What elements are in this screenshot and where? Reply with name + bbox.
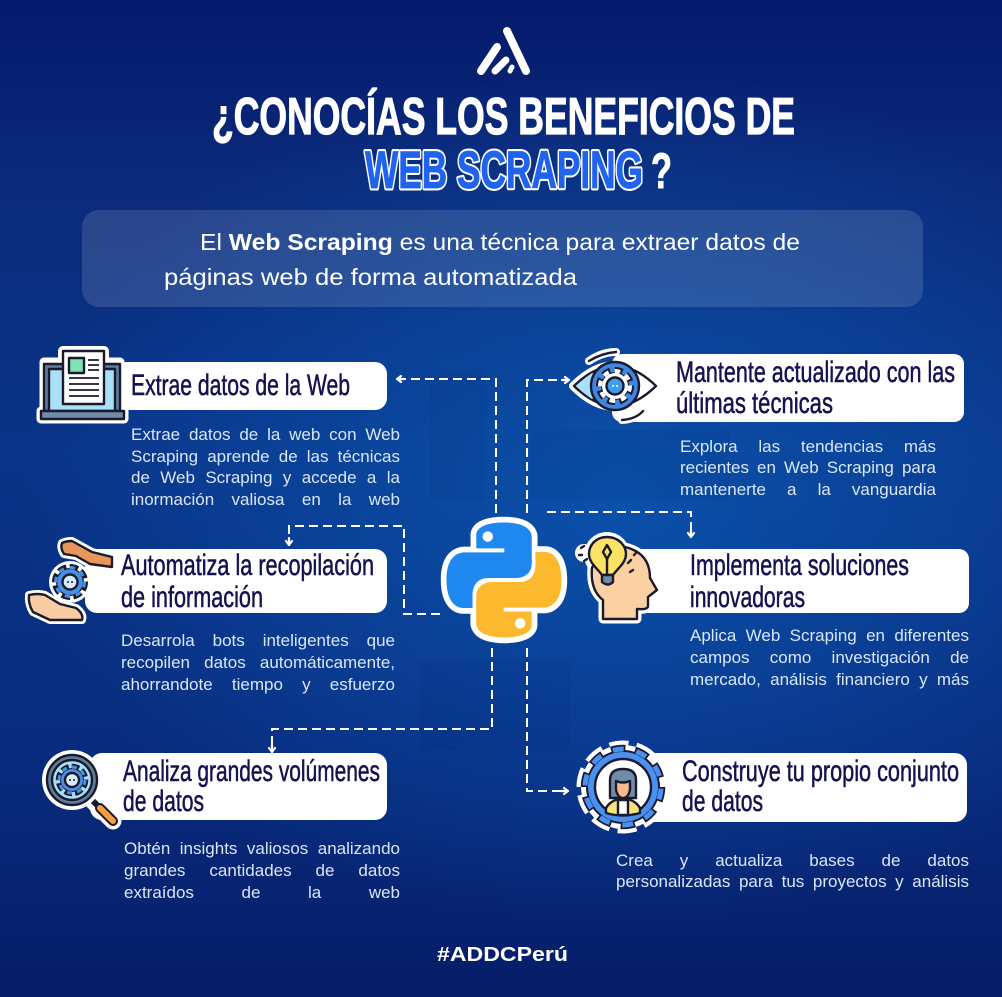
body text: Explora las tendencias más (680, 437, 936, 456)
body text: Obtén insights valiosos analizando (124, 839, 400, 858)
body text (616, 851, 969, 891)
heading card: de datos (682, 785, 763, 818)
body text (121, 631, 395, 694)
heading card: Extrae datos de la Web (131, 369, 350, 402)
body text: ahorrandote tiempo y esfuerzo (121, 675, 395, 694)
python logo (440, 516, 568, 644)
title: WEB SCRAPING (365, 141, 643, 200)
icon: laptop with document (41, 351, 124, 419)
body text: Aplica Web Scraping en diferentes (690, 626, 969, 645)
heading card (612, 354, 964, 422)
body text (131, 425, 400, 509)
body text (124, 839, 400, 902)
heading card: de información (121, 581, 263, 614)
body text: mantenerte a la vanguardia (680, 480, 936, 499)
body text: recopilen datos automáticamente, (121, 653, 395, 672)
heading card (625, 549, 969, 614)
panel: analiza (42, 750, 400, 902)
heading card: de datos (123, 785, 204, 818)
heading card (85, 549, 387, 614)
body text: extraídos de la web (124, 883, 400, 902)
heading card: últimas técnicas (676, 387, 833, 420)
footer hashtag: #ADDCPerú (437, 944, 568, 966)
panel: construye (576, 740, 969, 891)
icon: hands holding gear (29, 541, 112, 620)
body text (680, 437, 936, 499)
body text: personalizadas para tus proyectos y análisis (616, 872, 969, 891)
body text: recientes en Web Scraping para (680, 458, 936, 477)
heading card: innovadoras (690, 581, 805, 614)
title (212, 87, 795, 200)
icon: eye with gear (573, 352, 657, 420)
body text: campos como investigación de (690, 648, 969, 667)
body text (690, 626, 969, 689)
panel: automatiza (24, 537, 395, 694)
panel: extrae datos (36, 346, 400, 509)
body text: mercado, análisis financiero y más (690, 670, 969, 689)
logo (477, 27, 530, 75)
body text: de Web Scraping y accede a la (131, 468, 400, 487)
heading card: Automatiza la recopilación (121, 549, 374, 582)
heading card (90, 753, 387, 820)
body text: Desarrola bots inteligentes que (121, 631, 395, 650)
body text: inormación valiosa en la web (131, 490, 400, 509)
title: WEB SCRAPING (365, 141, 643, 200)
heading card: Analiza grandes volúmenes (123, 755, 380, 788)
intro panel (82, 210, 923, 307)
intro panel: El Web Scraping es una técnica para extraer datos de (200, 229, 800, 255)
heading card (115, 362, 387, 410)
icon: gear with person (580, 744, 666, 830)
icon: magnifier with gear (42, 750, 113, 821)
body text: grandes cantidades de datos (124, 861, 400, 880)
title: ? (651, 143, 672, 199)
heading card: Implementa soluciones (690, 549, 909, 582)
intro panel: páginas web de forma automatizada (164, 264, 577, 290)
icon: head with light bulb (575, 532, 657, 619)
body text: Scraping aprende de las técnicas (131, 447, 400, 466)
panel: implementa (575, 532, 969, 689)
heading card (630, 753, 967, 822)
panel: mantente actualizado (569, 348, 964, 499)
body text: Crea y actualiza bases de datos (616, 851, 969, 870)
body text: Extrae datos de la web con Web (131, 425, 400, 444)
